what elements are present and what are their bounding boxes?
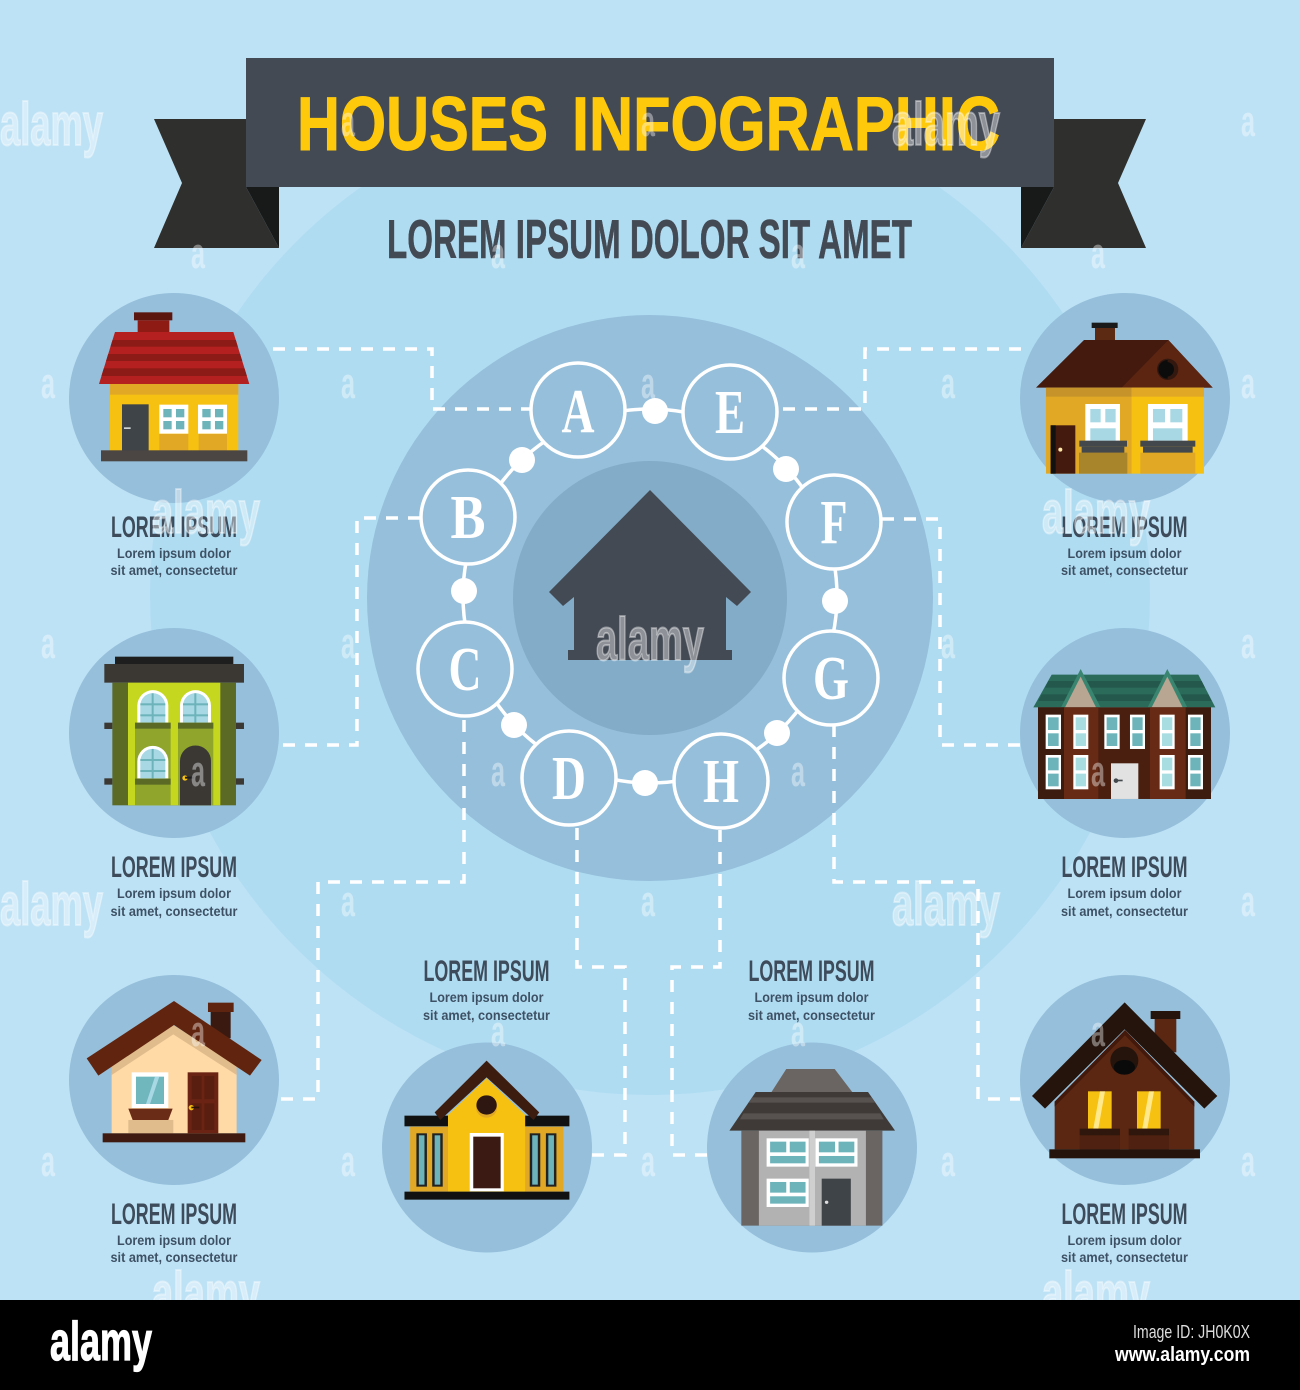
- label: house G: [1061, 1198, 1189, 1265]
- stock watermark overlay: a: [191, 747, 205, 796]
- stock watermark overlay: a: [341, 619, 355, 668]
- footer logo text: alamy: [50, 1310, 152, 1372]
- stock watermark overlay: a: [1241, 1137, 1255, 1186]
- icon: yellow house with brown roof: [1036, 323, 1213, 474]
- label: house A: [110, 511, 238, 578]
- stock watermark overlay: a: [641, 97, 655, 146]
- central inner circle: [513, 461, 787, 735]
- icon: central house silhouette: [549, 490, 751, 660]
- label: house B: sit amet, consectetur: [110, 904, 238, 919]
- label: house H: Lorem ipsum dolor: [754, 990, 869, 1005]
- panel: house circle backgrounds: [69, 293, 1230, 1252]
- stock watermark overlay: a: [341, 97, 355, 146]
- letters: A: [562, 378, 595, 446]
- stock watermark overlay: a: [41, 359, 55, 408]
- stock watermark overlay: a: [341, 1137, 355, 1186]
- icon: red roof house: [99, 312, 249, 461]
- stock watermark overlay: a: [941, 359, 955, 408]
- stock watermark overlay: a: [491, 229, 505, 278]
- label: house C: sit amet, consectetur: [110, 1250, 238, 1265]
- stock watermark overlay: a: [1091, 1007, 1105, 1056]
- stock watermark overlay: a: [1241, 97, 1255, 146]
- icon: green two-storey house: [104, 657, 244, 805]
- label: house G: LOREM IPSUM: [1062, 1198, 1188, 1231]
- central medium circle: [367, 315, 933, 881]
- dashed connector lines: [273, 349, 1025, 1155]
- stock watermark overlay: alamy: [892, 91, 1000, 158]
- letters: E: [715, 379, 745, 447]
- stock watermark overlay: alamy: [152, 1260, 260, 1327]
- label: house F: LOREM IPSUM: [1062, 851, 1188, 884]
- label: house A: LOREM IPSUM: [111, 511, 237, 544]
- stock watermark overlay: a: [1241, 877, 1255, 926]
- stock watermark overlay: alamy: [596, 606, 704, 673]
- icon: yellow house with columns: [404, 1061, 569, 1200]
- label: house E: LOREM IPSUM: [1062, 511, 1188, 544]
- label: house A: Lorem ipsum dolor: [117, 546, 232, 561]
- label: house G: sit amet, consectetur: [1061, 1250, 1189, 1265]
- stock watermark overlay: a: [41, 619, 55, 668]
- stock watermark overlay: alamy: [0, 91, 103, 158]
- label: house G: Lorem ipsum dolor: [1068, 1233, 1182, 1248]
- stock watermark overlay: a: [341, 877, 355, 926]
- letters: [448, 378, 849, 816]
- label: house E: [1061, 511, 1189, 578]
- label: house A: sit amet, consectetur: [110, 563, 238, 578]
- label: house C: LOREM IPSUM: [111, 1198, 237, 1231]
- stock watermark overlay: a: [641, 359, 655, 408]
- label: house F: sit amet, consectetur: [1061, 904, 1189, 919]
- stock watermark overlay: a: [341, 359, 355, 408]
- label: house F: [1061, 851, 1189, 919]
- central letter ring: [418, 363, 881, 828]
- stock watermark overlay: alamy: [0, 871, 103, 938]
- ring dots: [451, 398, 848, 796]
- title: [297, 82, 1000, 167]
- label: house H: [748, 955, 876, 1023]
- label: house H: LOREM IPSUM: [748, 955, 874, 988]
- label: house F: Lorem ipsum dolor: [1068, 886, 1182, 901]
- label: house C: Lorem ipsum dolor: [117, 1233, 232, 1248]
- label: house D: [423, 955, 551, 1023]
- icon: brick mansion: [1033, 669, 1215, 799]
- label: house D: Lorem ipsum dolor: [430, 990, 544, 1005]
- letter circles: [418, 363, 881, 828]
- stock watermark overlay: a: [1241, 359, 1255, 408]
- stock watermark overlay: a: [791, 747, 805, 796]
- letters: F: [820, 489, 848, 557]
- label: house C: [110, 1198, 238, 1265]
- title: HOUSES: [297, 82, 548, 167]
- stock watermark overlay: a: [941, 619, 955, 668]
- title: INFOGRAPHIC: [572, 82, 1000, 167]
- title ribbon banner: [154, 58, 1146, 248]
- stock watermark overlay: a: [1241, 619, 1255, 668]
- letters: G: [813, 645, 849, 713]
- subtitle: LOREM IPSUM DOLOR SIT AMET: [387, 208, 912, 270]
- stock watermark overlay: a: [641, 1137, 655, 1186]
- stock watermark overlay: a: [191, 1007, 205, 1056]
- label: house E: sit amet, consectetur: [1061, 563, 1189, 578]
- label: house B: [110, 851, 238, 919]
- footer url: www.alamy.com: [1114, 1344, 1250, 1366]
- label: house D: LOREM IPSUM: [424, 955, 550, 988]
- letters: D: [552, 745, 586, 813]
- label: house E: Lorem ipsum dolor: [1068, 546, 1182, 561]
- letters: B: [450, 484, 486, 552]
- stock watermark overlay: alamy: [1042, 479, 1150, 546]
- label: house H: sit amet, consectetur: [748, 1008, 876, 1023]
- stock watermark overlay: a: [491, 747, 505, 796]
- stock watermark overlay: a: [641, 877, 655, 926]
- stock watermark overlay: alamy: [1042, 1260, 1150, 1327]
- label: house B: LOREM IPSUM: [111, 851, 237, 884]
- label: house D: sit amet, consectetur: [423, 1008, 551, 1023]
- stock watermark overlay: alamy: [892, 871, 1000, 938]
- icon: grey house: [729, 1069, 895, 1226]
- stock watermark overlay: a: [791, 1007, 805, 1056]
- stock watermark overlay: a: [941, 1137, 955, 1186]
- stock watermark overlay: a: [191, 229, 205, 278]
- footer image id: Image ID: JH0K0X: [1133, 1322, 1250, 1342]
- footer bar: [0, 1300, 1300, 1390]
- stock watermark overlay: a: [41, 1137, 55, 1186]
- letters: C: [448, 636, 482, 704]
- stock watermark overlay: a: [1091, 747, 1105, 796]
- stock watermark overlay: a: [1091, 229, 1105, 278]
- stock watermark overlay: alamy: [152, 479, 260, 546]
- icon: cream cottage: [87, 1001, 262, 1142]
- background large circle: [150, 95, 1150, 1095]
- stock watermark overlay: a: [491, 1007, 505, 1056]
- label: house B: Lorem ipsum dolor: [117, 886, 232, 901]
- stock watermark overlay: a: [791, 229, 805, 278]
- icon: dark brown cabin: [1032, 1002, 1217, 1158]
- letters: H: [703, 748, 739, 816]
